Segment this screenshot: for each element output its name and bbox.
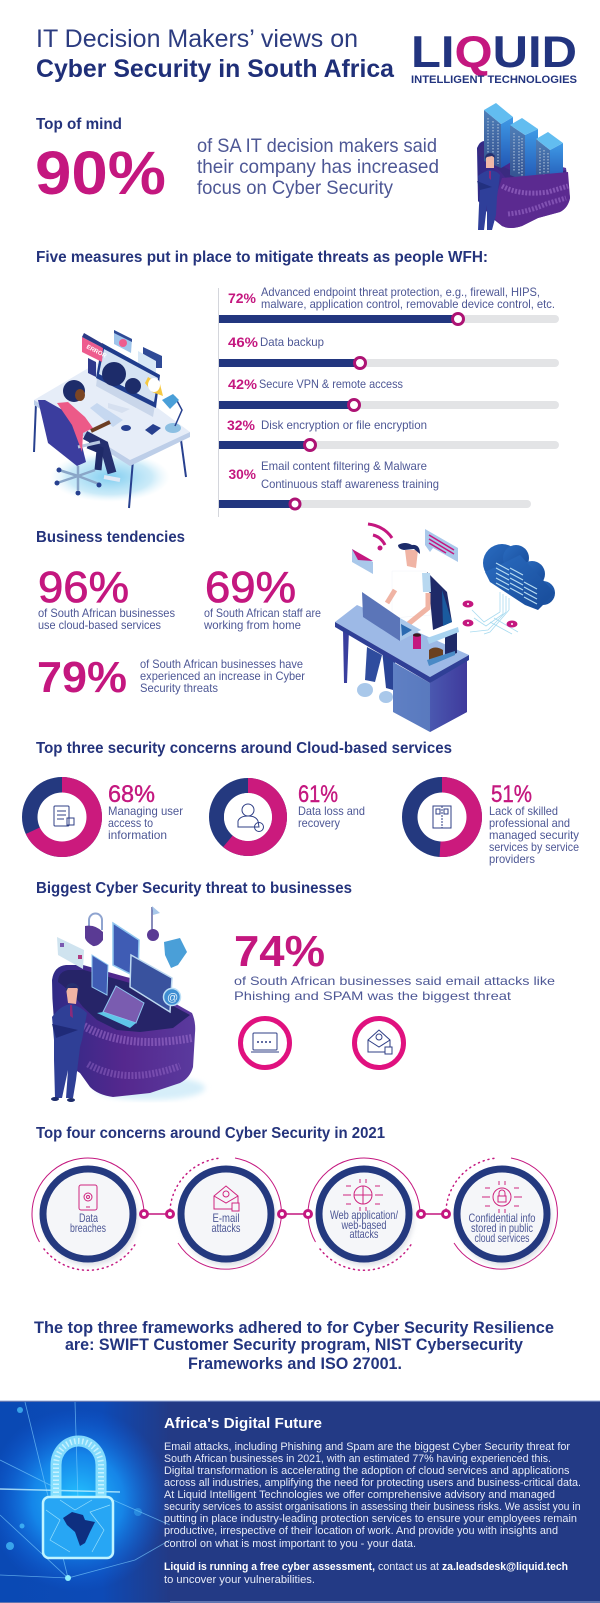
title [36,25,395,83]
stat: 69%: working from home [203,618,301,632]
stat: 61% and label: Data loss and [298,804,365,818]
stat: 96%: of South African businesses [38,606,175,620]
connector knobs [140,1210,450,1218]
stat: 51% and label: Lack of skilled [489,804,558,818]
illustration: businessman with devices and security icons: @ [167,992,178,1004]
bar: 42% secure VPN: Secure VPN & remote access [259,377,403,391]
chart: donut 51% [410,785,474,849]
stat: 96%: 96% [38,563,129,612]
stat: 51% and label: 51% [491,781,532,808]
stat: 96%: use cloud-based services [38,618,161,632]
circle: e-mail attacks [170,1158,281,1269]
stat: 90%: 90% [35,139,166,207]
circle: data breaches [32,1158,144,1270]
circle: web attacks [308,1158,420,1270]
stat: 61% and label [298,781,365,830]
stat: 61% and label: recovery [298,816,340,830]
bar: 42% secure VPN [219,376,559,410]
bar: 46% data backup: 46% [228,334,259,350]
icon: server document [433,806,451,828]
callout: free cyber assessment: Liquid is running a free cyber assessment, [164,1561,375,1573]
circle: confidential info: Confidential info [468,1211,536,1225]
bar: 72% advanced endpoint threat protection: Advanced endpoint threat protection, e.g., firewall, HIPS, [261,285,540,299]
stat: 69%: 69% [205,563,296,612]
text block: frameworks statement: are: SWIFT Customer Security program, NIST Cybersecurity [65,1336,524,1354]
stat: 69%: of South African staff are [204,606,321,620]
icon: document [54,806,74,826]
bar: 72% advanced endpoint threat protection [219,285,559,324]
bar: 32% disk encryption: 32% [227,417,256,433]
text block: panel body: Digital transformation is accelerating the adoption of cloud services and applications [164,1465,570,1477]
stat: 79%: 79% [37,653,127,702]
stat: 74%: 74% [234,927,325,976]
text block: panel body: At Liquid Intelligent Technologies we offer comprehensive advisory and managed [164,1489,555,1501]
circle: e-mail attacks: attacks [212,1221,240,1235]
text block: panel body: control on what is most important to you - your data. [164,1538,416,1550]
callout: free cyber assessment [164,1561,568,1586]
panel: Africa's Digital Future [0,1401,600,1603]
text block: panel body [164,1441,581,1550]
stat: 79% [37,653,305,702]
circle: confidential info [446,1158,557,1269]
stat: 79%: experienced an increase in Cyber [140,669,305,683]
chart: five measures bars [218,285,559,517]
stat: 79%: Security threats [140,681,218,695]
text block: panel body: productive, irrespective of their location of work. And provide you with insights and [164,1525,558,1537]
bar: 46% data backup: Data backup [260,335,324,349]
text block: frameworks statement: The top three frameworks adhered to for Cyber Security Resilience [34,1319,554,1337]
circle: web attacks: attacks [350,1227,378,1241]
circle: confidential info: stored in public [471,1221,533,1235]
connectors between circles [144,1213,446,1215]
panel: business tendencies [36,529,321,702]
stat: 68% and label: 68% [108,781,155,808]
logo: Liquid Intelligent Technologies: LIQUID [411,28,577,77]
title: Cyber Security in South Africa [36,55,395,83]
heading: biggest threat: Biggest Cyber Security threat to businesses [36,880,352,897]
stat: 51% and label: services by service [489,840,579,854]
circle: web attacks: Web application/ [330,1208,399,1222]
icon: user [238,804,264,832]
callout: free cyber assessment: za.leadsdesk@liquid.tech [442,1561,568,1573]
illustration: businessman with devices and security icons [51,906,205,1102]
icon: password screen [240,1018,290,1068]
title: IT Decision Makers’ views on [36,25,358,53]
stat: 96% [38,563,175,632]
text block: panel body: Email attacks, including Phishing and Spam are the biggest Cyber Security threat for [164,1441,570,1453]
stat: 68% and label: Managing user [108,804,183,818]
callout: free cyber assessment: contact us at [378,1561,440,1573]
heading: Africa's Digital Future: Africa's Digital Future [164,1415,322,1432]
text block: 74% description [234,974,555,1003]
circle: data breaches: breaches [70,1221,106,1235]
text block: panel body: South African businesses in 2021, with an estimated 77% having experienced this. [164,1453,551,1465]
circle: confidential info: cloud services [474,1231,530,1245]
stat: 51% and label: managed security [489,828,579,842]
stat: 68% and label: information [108,828,167,842]
stat: 51% and label [489,781,579,866]
heading: cloud concerns: Top three security concerns around Cloud-based services [36,740,452,757]
bar: 30% email filtering and staff training [219,459,531,509]
stat: 61% and label: 61% [298,781,338,808]
heading: business tendencies: Business tendencies [36,529,185,546]
chart: four concerns chain [32,1158,557,1270]
bar: 32% disk encryption: Disk encryption or file encryption [261,418,427,432]
text block: panel body: across all industries, amplifying the need for protecting users and business-critical data. [164,1477,581,1489]
logo: Liquid Intelligent Technologies: INTELLIGENT TECHNOLOGIES [411,74,577,86]
bar: 72% advanced endpoint threat protection: malware, application control, removable device control, etc. [261,297,555,311]
panel: cloud concern 68% [30,781,183,849]
bar: 30% email filtering and staff training: 30% [228,466,257,482]
heading: four concerns: Top four concerns around Cyber Security in 2021 [36,1125,385,1142]
bar: 30% email filtering and staff training: Email content filtering & Malware [261,459,427,473]
text block: frameworks statement: Frameworks and ISO 27001. [188,1355,402,1373]
text block: frameworks statement [34,1319,554,1373]
heading: five measures: Five measures put in place to mitigate threats as people WFH: [36,249,488,266]
stat: 68% and label: access to [108,816,153,830]
chart: donut 68% [30,785,94,849]
panel: cloud concern 51% [410,781,579,866]
stat: 69% [203,563,321,632]
panel: cloud concern 61% [216,781,365,848]
bar: 46% data backup [219,334,559,368]
callout: free cyber assessment: to uncover your vulnerabilities. [164,1574,315,1586]
circle: data breaches: Data [79,1211,98,1225]
illustration: person at desk with error screen: ERROR [85,344,108,360]
icon: email bug [354,1018,404,1068]
bar: 30% email filtering and staff training: Continuous staff awareness training [261,477,439,491]
text block: 74% description: Phishing and SPAM was the biggest threat [234,989,512,1003]
text block: panel body: putting in place industry-leading protection services to ensure your employees remain [164,1513,577,1525]
text block: 74% description: of South African businesses said email attacks like [234,974,555,988]
circle: e-mail attacks: E-mail [212,1211,240,1225]
text block: 90% description: of SA IT decision makers said [197,135,437,157]
illustration: glowing padlock with Africa [0,1402,170,1602]
panel: top of mind [35,116,439,207]
illustration: server towers and businessman [477,103,570,230]
chart: donut 61% [216,786,280,848]
stat: 68% and label [108,781,183,842]
bar: 32% disk encryption [219,417,559,450]
text block: 90% description: their company has increased [197,156,439,178]
text block: 90% description: focus on Cyber Security [197,177,393,199]
illustration: person at desk with error screen [34,330,190,508]
text block: 90% description [197,135,439,199]
circle: web attacks: web-based [341,1218,386,1232]
stat: 79%: of South African businesses have [140,657,303,671]
illustration: person working on laptop with cloud [335,524,555,732]
stat: 51% and label: professional and [489,816,570,830]
heading: top of mind: Top of mind [36,116,122,133]
stat: 51% and label: providers [489,852,535,866]
bar: 42% secure VPN: 42% [228,376,258,392]
panel: biggest threat stat [234,927,555,1068]
bar: 72% advanced endpoint threat protection: 72% [228,290,257,306]
